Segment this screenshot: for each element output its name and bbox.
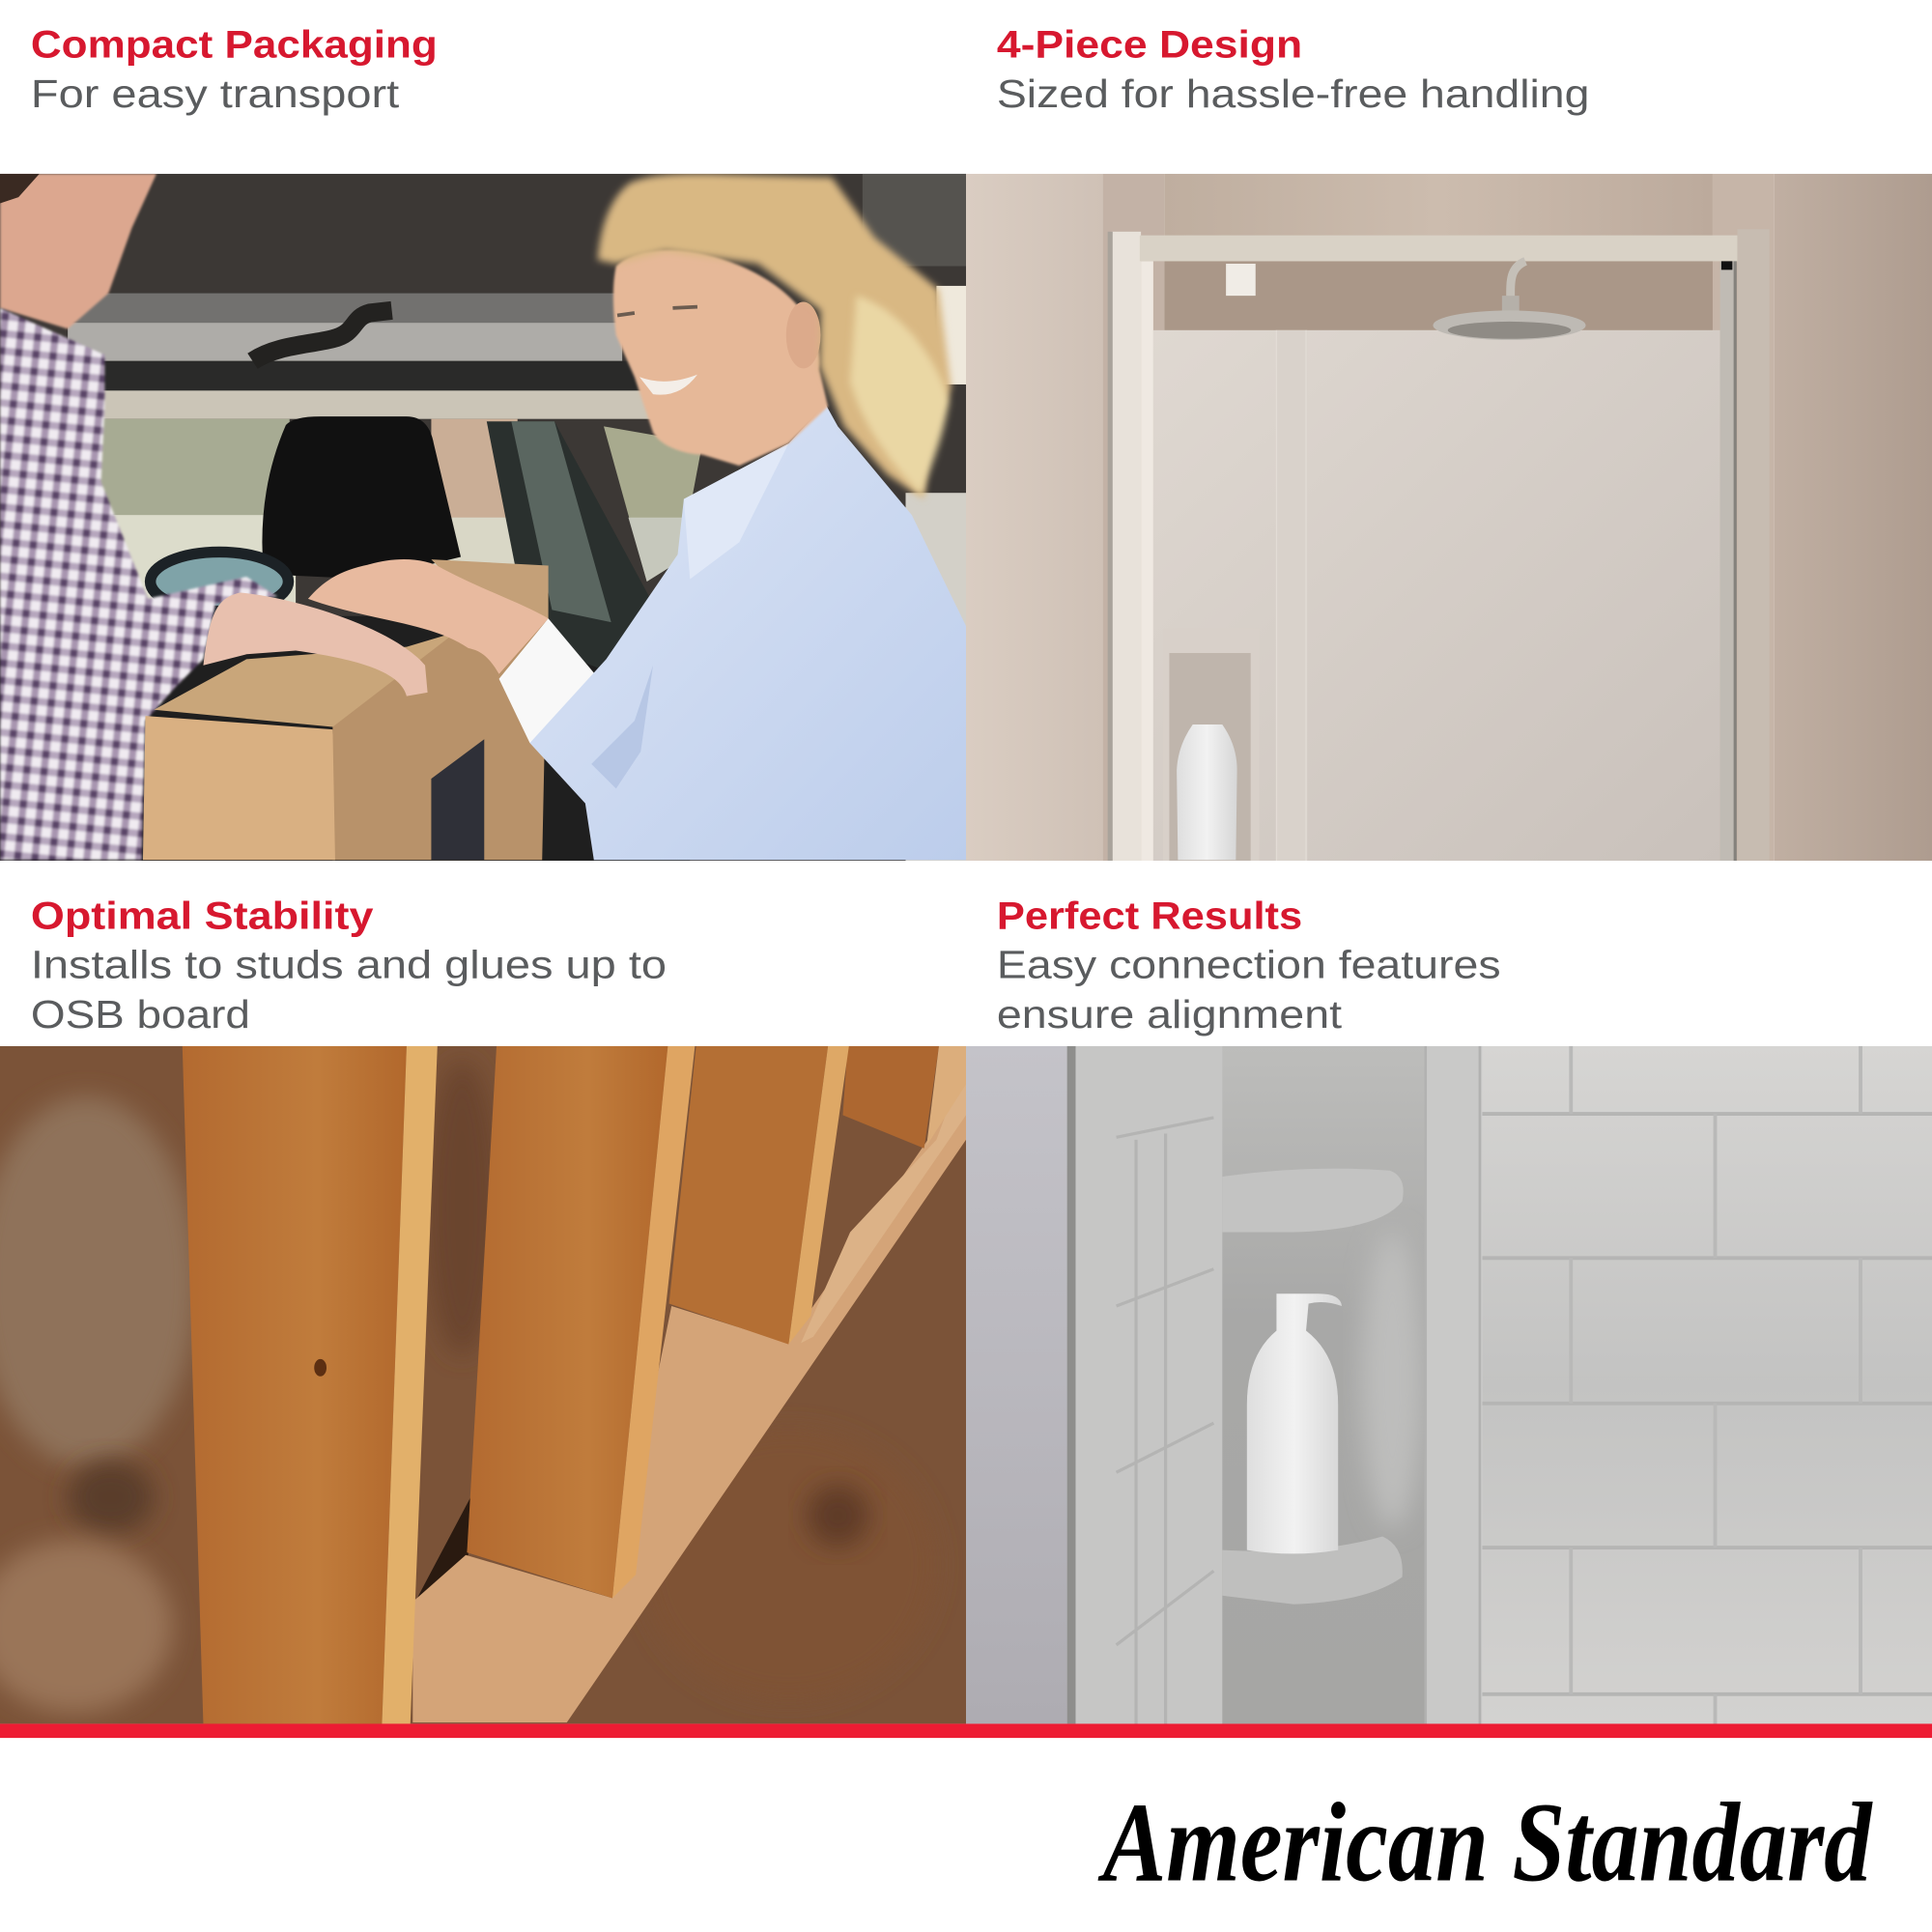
upper shelf [1222, 1169, 1404, 1233]
towel hook [1226, 264, 1256, 296]
woman's hair [598, 174, 952, 499]
shower wall panels [1153, 330, 1720, 862]
woman's blue shirt [529, 404, 966, 860]
heading: 4-Piece Design: Sized for hassle-free handling [997, 71, 1589, 116]
stud 4 [842, 1046, 966, 1149]
heading: Perfect Results: ensure alignment [997, 992, 1343, 1037]
OSB floor [0, 1046, 966, 1723]
man's checked shirt [0, 308, 277, 860]
man's hand [203, 593, 428, 696]
icon: hose on the tailgate [252, 310, 392, 361]
niche wall [1222, 1046, 1426, 1723]
photo panel: shower enclosure [966, 174, 1932, 862]
woman's hand and forearm [308, 559, 549, 674]
left door post [1108, 232, 1153, 862]
heading: Optimal Stability: OSB board [31, 992, 250, 1037]
right strip [1426, 1046, 1482, 1723]
subway tile wall [1482, 1046, 1932, 1723]
top rail [1140, 236, 1737, 261]
lower shelf [1222, 1537, 1403, 1605]
photo panel: wall studs on OSB board [0, 1046, 966, 1723]
red divider bar [0, 1723, 1932, 1738]
left wall [966, 174, 1103, 862]
photo panel: shower wall with niche and shelves [966, 1046, 1932, 1723]
back wall [1164, 174, 1713, 334]
right door post [1720, 229, 1770, 862]
man's head [0, 174, 156, 329]
woman's smile [639, 375, 697, 395]
woman's white undersleeve [498, 618, 594, 743]
car seat headrest [262, 416, 461, 579]
stud 1 [183, 1046, 438, 1723]
left corner panel [1076, 1046, 1224, 1723]
bottom plate [412, 1084, 966, 1722]
woman's neck and face [613, 249, 828, 466]
heading: 4-Piece Design: 4-Piece Design [997, 23, 1302, 66]
steering wheel [151, 552, 288, 611]
right wall [1775, 174, 1932, 862]
heading: Compact Packaging: For easy transport [31, 71, 400, 116]
heading: Optimal Stability [31, 895, 667, 1037]
right return wall [1713, 174, 1775, 862]
woman's ear [786, 301, 820, 368]
heading: 4-Piece Design [997, 23, 1589, 116]
heading: Compact Packaging: Compact Packaging [31, 23, 438, 66]
heading: Optimal Stability: Optimal Stability [31, 895, 373, 938]
heading: Perfect Results: Easy connection features [997, 943, 1501, 987]
icon: pump bottle [1247, 1293, 1342, 1553]
photo panel: handing over compact box at car [0, 174, 966, 862]
cardboard box [143, 559, 549, 860]
heading: Perfect Results [997, 895, 1501, 1037]
stud 2 [467, 1046, 695, 1598]
heading: Perfect Results: Perfect Results [997, 895, 1302, 938]
heading: Compact Packaging [31, 23, 438, 116]
icon: bottle in niche [1177, 724, 1237, 860]
heading: Optimal Stability: Installs to studs and glues up to [31, 943, 667, 987]
door frame strip [966, 1046, 1067, 1723]
icon: shower head [1433, 261, 1586, 340]
woman's eyes [617, 307, 697, 316]
stud 3 [669, 1046, 849, 1345]
corner niche [1169, 653, 1251, 861]
left return wall [1103, 174, 1164, 862]
dark gap beneath the plate [415, 1497, 470, 1602]
